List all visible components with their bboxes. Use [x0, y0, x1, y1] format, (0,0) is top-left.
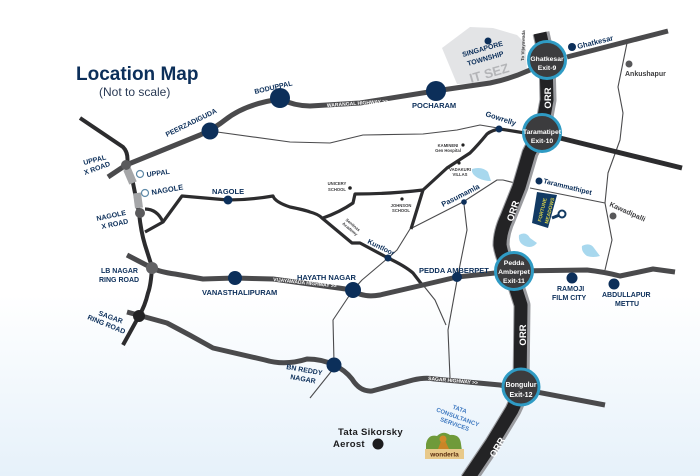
- title: (Not to scale): [99, 85, 170, 99]
- ORR labels: ORR: [505, 199, 522, 223]
- small landmark labels: [328, 143, 471, 237]
- left side place labels: [83, 154, 184, 336]
- highway labels: [273, 30, 526, 386]
- highway labels: SAGAR HIGHWAY >>: [428, 376, 478, 386]
- metro station icons: [136, 170, 148, 196]
- place markers: [202, 38, 632, 372]
- center place labels: [165, 33, 614, 385]
- center place labels: VANASTHALIPURAM: [202, 288, 277, 297]
- center place labels: Gowrelly: [484, 109, 518, 128]
- Tata Consultancy Services label: CONSULTANCY: [435, 408, 480, 429]
- exit badge: Ghatkesar Exit-9: [528, 42, 566, 78]
- Tata Consultancy Services label: TATA: [451, 405, 468, 416]
- title: Location Map: [76, 64, 198, 85]
- small landmark labels: UNICERY: [328, 181, 347, 186]
- right side place labels: FILM CITY: [552, 295, 587, 302]
- exit badge: Taramatipet Exit-10: [523, 114, 562, 152]
- IT SEZ area: [442, 27, 527, 86]
- ORR labels: ORR: [488, 436, 508, 460]
- exit badge: Ghatkesar Exit-9: Ghatkesar: [530, 56, 564, 63]
- center place labels: POCHARAM: [412, 101, 456, 110]
- left side place labels: RING ROAD: [99, 277, 139, 284]
- exit badge: Pedda Amberpet Exit-11: Amberpet: [498, 269, 531, 276]
- ORR labels: ORR: [518, 324, 529, 346]
- small landmark labels: VILLAS: [453, 172, 468, 177]
- ORR ring road: [467, 33, 548, 476]
- property logo: Fortune Meadows marker: FORTUNE: [537, 197, 549, 222]
- small landmark labels: SCHOOL: [392, 208, 410, 213]
- small landmark labels: Gen Hospital: [435, 148, 461, 153]
- left side place labels: UPPAL: [83, 154, 108, 167]
- center place labels: NAGOLE: [212, 187, 244, 196]
- exit badge: Bongulur Exit-12: Exit-12: [510, 392, 533, 399]
- thin local roads: [210, 43, 627, 398]
- small landmark labels: SCHOOL: [328, 187, 346, 192]
- center place labels: Tarammathipet: [543, 178, 593, 197]
- Wonderla logo: wonderla: [429, 452, 459, 458]
- exit badge: Pedda Amberpet Exit-11: Pedda: [504, 260, 524, 267]
- exit badge: Pedda Amberpet Exit-11: [496, 252, 532, 290]
- black secondary roads: [145, 129, 682, 286]
- left side place labels: UPPAL: [146, 169, 171, 179]
- center place labels: TOWNSHIP: [467, 51, 505, 68]
- center place labels: Pasumamla: [440, 181, 482, 209]
- small landmark labels: VADAKURI: [449, 167, 471, 172]
- property logo: Fortune Meadows marker: MEADOWS: [544, 197, 557, 224]
- center place labels: HAYATH NAGAR: [297, 273, 356, 282]
- left side place labels: X ROAD: [83, 161, 111, 177]
- center place labels: Kuntloor: [366, 239, 396, 258]
- small landmark labels: KAMINENI: [438, 143, 458, 148]
- center place labels: PEERZADIGUDA: [165, 108, 218, 139]
- exit badge: Pedda Amberpet Exit-11: Exit-11: [503, 278, 525, 285]
- Tata Consultancy Services label: SERVICES: [439, 417, 470, 433]
- exit badge: Bongulur Exit-12: [503, 369, 539, 405]
- left side place labels: X ROAD: [101, 218, 129, 231]
- left side place labels: NAGOLE: [96, 210, 127, 223]
- left side place labels: NAGOLE: [151, 183, 184, 197]
- left side place labels: LB NAGAR: [101, 268, 138, 275]
- small landmark labels: Sentinas: [345, 217, 362, 233]
- Tata Sikorsky Aerospace label: [333, 427, 403, 450]
- highway labels: VIJAYAWADA HIGHWAY >>: [273, 277, 337, 290]
- right side place labels: Kawadipalli: [608, 201, 646, 224]
- Tata Sikorsky Aerospace label: Aerost: [333, 439, 365, 450]
- right side place labels: RAMOJI: [557, 286, 584, 293]
- property logo: Fortune Meadows marker: [532, 192, 566, 228]
- center place labels: SINGAPORE: [462, 41, 504, 59]
- left side place labels: RING ROAD: [86, 314, 126, 336]
- center place labels: BN REDDY: [286, 364, 323, 377]
- Uppal to Sagar vertical road: [80, 118, 152, 345]
- highway labels: To Vijayawada: [520, 30, 526, 61]
- lakes: [472, 168, 600, 257]
- center place labels: BODUPPAL: [254, 80, 294, 96]
- road junction markers: [121, 160, 158, 322]
- right side place labels: METTU: [615, 301, 639, 308]
- highway labels: WARANGAL HIGHWAY >>: [327, 99, 388, 109]
- right side place labels: ABDULLAPUR: [602, 292, 651, 299]
- center place labels: NAGAR: [290, 374, 316, 385]
- Wonderla logo: [425, 433, 464, 459]
- Tata Sikorsky Aerospace label: Tata Sikorsky: [338, 427, 403, 438]
- exit badge: Bongulur Exit-12: Bongulur: [505, 382, 537, 389]
- main highways: [108, 31, 675, 405]
- center place labels: Ghatkesar: [576, 33, 614, 51]
- ORR labels: ORR: [543, 87, 554, 109]
- small landmark labels: JOHNSON: [391, 203, 411, 208]
- left side place labels: SAGAR: [97, 310, 123, 326]
- exit badge: Taramatipet Exit-10: Taramatipet: [523, 129, 562, 136]
- right side place labels: Ankushapur: [625, 71, 666, 78]
- ORR labels: [488, 87, 554, 460]
- exit badge: Taramatipet Exit-10: Exit-10: [531, 138, 553, 145]
- right side place labels: [552, 71, 666, 308]
- small landmark labels: Academy: [341, 221, 359, 237]
- IT SEZ area: IT SEZ: [468, 60, 511, 86]
- exit badge: Ghatkesar Exit-9: Exit-9: [538, 65, 556, 72]
- title: [76, 64, 198, 99]
- center place labels: PEDDA AMBERPET: [419, 266, 489, 275]
